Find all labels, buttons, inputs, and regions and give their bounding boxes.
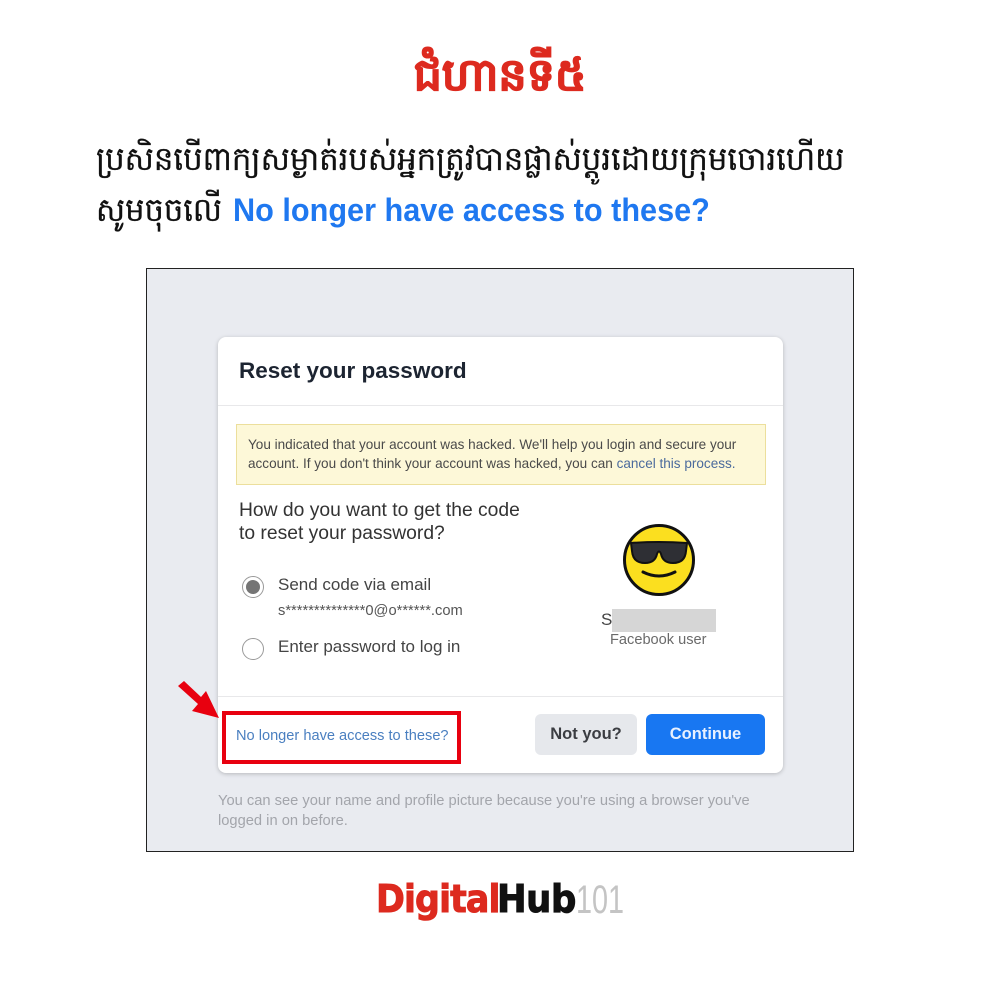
logo word: Digital: Digital [376,877,500,922]
code question: to reset your password? [239,523,445,544]
instruction line 2 khmer: សូមចុចលើ [96,191,222,228]
browser note [218,793,750,829]
logo [376,877,624,922]
reset password card [218,337,783,773]
red highlight box [222,711,461,764]
code question [239,500,520,544]
email option: Send code via email [278,575,431,594]
logo word: Hub: Hub [497,877,576,922]
screenshot panel [146,268,854,852]
help link: No longer have access to these? [236,728,449,744]
continue button [646,714,765,755]
warning banner [236,424,766,485]
arrow [178,681,219,718]
warning text: account. If you don't think your account was hacked, you can cancel this process. [248,456,736,471]
not you button [535,714,637,755]
browser note: You can see your name and profile picture because you're using a browser you've [218,793,750,809]
radio empty [242,638,264,660]
footer divider [218,696,783,697]
code question: How do you want to get the code [239,500,520,521]
user initial: S [601,610,612,629]
warning text: You indicated that your account was hacked. We'll help you login and secure your [248,437,736,452]
title: ជំហានទី៥ [414,51,586,100]
icon: sunglasses smiley [623,524,695,596]
card heading: Reset your password [239,358,467,383]
instruction line 1: ប្រសិនបើពាក្យសម្ងាត់របស់អ្នកត្រូវបានផ្លាស់ប្តូរដោយក្រុមចោរហើយ [96,140,844,177]
password option: Enter password to log in [278,637,460,656]
header divider [218,405,783,406]
radio dot [246,580,260,594]
logo number: 101: 101 [576,878,624,922]
user role: Facebook user [610,632,707,648]
masked email: s**************0@o******.com [278,603,463,619]
warning text [248,437,736,471]
radio selected [242,576,264,598]
instruction text [96,138,844,232]
instruction line 2 link: No longer have access to these? [233,192,710,228]
continue button: Continue [670,725,741,743]
not you button: Not you? [550,725,622,743]
redacted name [612,609,716,632]
browser note: logged in on before. [218,813,348,829]
